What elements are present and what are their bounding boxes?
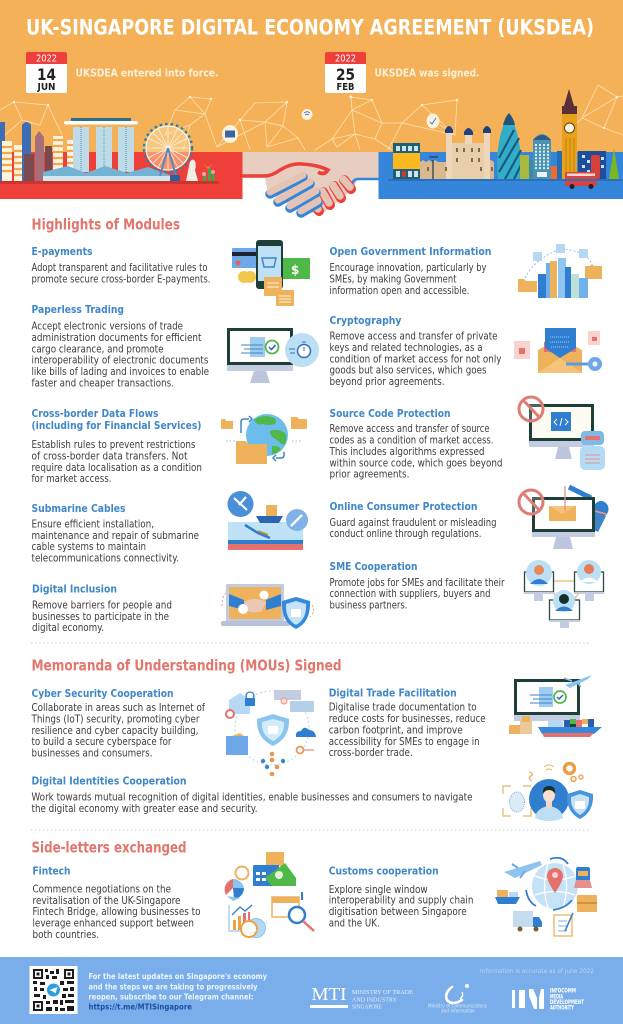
MOU: Cyber Security Cooperation: Collaborate in areas such as Internet of xyxy=(32,703,205,714)
icon: protected source code monitor xyxy=(519,397,605,470)
module: Source Code Protection: prior agreements. xyxy=(330,470,410,480)
footer call to action: https://t.me/MTISingapore xyxy=(88,1002,192,1012)
MOU: Digital Trade Facilitation: carbon footprint, and improve xyxy=(329,726,463,736)
side-letter: Fintech: Fintech xyxy=(32,864,70,878)
icon: mobile payment xyxy=(232,240,310,306)
module: Online Consumer Protection: Online Consumer Protection xyxy=(330,500,478,513)
divider xyxy=(31,642,590,644)
module: Cross-border Data Flows: require data localisation as a condition xyxy=(32,463,202,474)
module: Cross-border Data Flows: Establish rules to prevent restrictions xyxy=(32,440,196,451)
module: Open Government Information xyxy=(330,245,492,297)
date badge: 14 Jun 2022: 14 xyxy=(37,65,56,84)
module: Online Consumer Protection: conduct online through regulations. xyxy=(330,529,482,540)
module: Online Consumer Protection xyxy=(330,500,496,540)
date caption: signed: UKSDEA was signed. xyxy=(374,68,480,80)
icon: fishing email monitor xyxy=(519,486,608,549)
date badge: 25 Feb 2022 xyxy=(325,52,366,93)
module: Submarine Cables: Submarine Cables xyxy=(32,502,126,515)
icon: submarine cable repair xyxy=(228,491,308,550)
module: Cross-border Data Flows: of cross-border data transfers. Not xyxy=(32,452,188,462)
MOU: Digital Trade Facilitation: Digitalise trade documentation to xyxy=(329,702,477,714)
module: Paperless Trading: like bills of lading and invoices to enable xyxy=(32,367,209,378)
module: Cryptography xyxy=(330,314,502,388)
blue UK band xyxy=(378,152,623,199)
module: Digital Inclusion: Remove barriers for people and xyxy=(32,600,172,612)
logo: Ministry of Communications and Information: and Information xyxy=(441,1008,475,1014)
module: Source Code Protection: within source code, which goes beyond xyxy=(330,458,502,470)
side-letter: Fintech: both countries. xyxy=(32,930,99,941)
side-letter: Fintech: Fintech Bridge, allowing businesses to xyxy=(32,907,200,918)
icon: wifi bubble xyxy=(302,109,312,120)
icon: laptop handshake and shield xyxy=(221,584,314,629)
module: Cryptography: goods but also services, which goes xyxy=(330,366,486,376)
module: Submarine Cables: telecommunications connectivity. xyxy=(32,554,179,564)
MOU: Cyber Security Cooperation: resilience and cyber capacity building, xyxy=(32,726,198,737)
icon: fast document check xyxy=(227,328,319,383)
module: Submarine Cables: cable systems to maintain xyxy=(32,542,146,553)
logo: IMDA: DEVELOPMENT xyxy=(550,999,585,1006)
footer band xyxy=(0,957,623,1024)
side-letter: Fintech: leverage enhanced support between xyxy=(32,918,194,930)
footer call to action xyxy=(88,971,267,1012)
MOU: Digital Identities Cooperation xyxy=(32,774,472,815)
MOU: Cyber Security Cooperation: Cyber Security Cooperation xyxy=(32,687,174,700)
London skyline xyxy=(388,89,623,189)
module: Cross-border Data Flows: for market access. xyxy=(32,474,112,485)
MOU: Digital Trade Facilitation: accessibility for SMEs to engage in xyxy=(329,737,480,748)
footer call to action: For the latest updates on Singapore's economy xyxy=(88,971,267,981)
heading: MOUs signed: Memoranda of Understanding (MOUs) Signed xyxy=(32,656,342,674)
module: Digital Inclusion: businesses to participate in the xyxy=(32,612,169,623)
module: Cryptography: beyond prior agreements. xyxy=(330,377,444,388)
side-letter: Fintech xyxy=(32,864,200,941)
module: Source Code Protection: codes as a condition of market access. xyxy=(330,436,494,446)
module: Paperless Trading xyxy=(32,303,209,389)
module: Open Government Information: SMEs, by making Government xyxy=(330,274,456,286)
icon: mobile payment: $ xyxy=(291,263,299,277)
module: Paperless Trading: interoperability of electronic documents xyxy=(32,356,208,366)
side-letter: Customs cooperation: Customs cooperation xyxy=(329,864,439,878)
MOU: Digital Identities Cooperation: the digital economy with greater ease and security. xyxy=(32,804,258,815)
footer call to action: and the steps we are taking to progressively xyxy=(88,982,258,992)
icon: check bubble xyxy=(426,114,440,128)
icon: connected people on monitors xyxy=(524,560,604,628)
divider xyxy=(31,829,590,831)
module: Cryptography: keys and related technologies, as a xyxy=(330,343,482,354)
heading: Side-letters exchanged: Side-letters exchanged xyxy=(32,838,186,856)
icon: cyber security ring xyxy=(226,690,316,776)
side-letter: Customs cooperation: Explore single window xyxy=(329,885,428,896)
side-letter: Customs cooperation: interoperability and supply chain xyxy=(329,896,473,906)
module: Online Consumer Protection: Guard against fraudulent or misleading xyxy=(330,518,496,529)
MOU: Cyber Security Cooperation: Things (IoT) security, promoting cyber xyxy=(31,714,200,726)
date badge: 25 Feb 2022: 25 xyxy=(336,65,355,84)
date caption: entered into force: UKSDEA entered into force. xyxy=(76,68,218,80)
QR code xyxy=(30,966,78,1014)
footer call to action: reopen, subscribe to our Telegram channel: xyxy=(88,992,254,1002)
module: Digital Inclusion xyxy=(32,583,172,634)
icon: encrypted mail and key xyxy=(514,328,602,373)
side-letter: Customs cooperation: digitisation between Singapore xyxy=(329,907,467,918)
logo: Ministry of Communications and Information xyxy=(428,984,487,1014)
module: Source Code Protection xyxy=(329,407,502,480)
red Singapore band xyxy=(0,152,242,199)
module: Paperless Trading: administration documents for efficient xyxy=(32,333,202,344)
MOU: Digital Trade Facilitation xyxy=(329,686,486,759)
module: SME Cooperation: business partners. xyxy=(330,600,408,612)
module: Source Code Protection: This includes algorithms expressed xyxy=(329,447,484,458)
Singapore skyline xyxy=(0,118,219,184)
module: Submarine Cables xyxy=(32,502,199,564)
side-letter: Customs cooperation xyxy=(329,864,473,930)
module: SME Cooperation: connection with suppliers, buyers and xyxy=(330,589,490,600)
logo: IMDA xyxy=(512,987,585,1012)
date badge: 25 Feb 2022: FEB xyxy=(336,82,354,93)
MOU: Digital Trade Facilitation: Digital Trade Facilitation xyxy=(329,686,457,700)
side-letter: Customs cooperation: and the UK. xyxy=(329,918,380,930)
module: Paperless Trading: Accept electronic versions of trade xyxy=(32,322,183,332)
logo: MTI: AND INDUSTRY xyxy=(352,996,398,1003)
logo: MTI: SINGAPORE xyxy=(352,1004,382,1011)
module: Paperless Trading: cargo clearance, and promote xyxy=(32,344,164,355)
logo: MTI xyxy=(310,984,413,1011)
module: Cryptography: Cryptography xyxy=(330,314,402,327)
date badge: 25 Feb 2022: 2022 xyxy=(335,54,356,64)
icon: globe and folders xyxy=(221,414,307,464)
date badge: 14 Jun 2022 xyxy=(26,52,67,93)
logo: MTI: MINISTRY OF TRADE xyxy=(352,989,413,996)
module: Paperless Trading: Paperless Trading xyxy=(32,303,124,316)
module: Digital Inclusion: Digital Inclusion xyxy=(32,583,117,596)
module: Open Government Information: Encourage innovation, particularly by xyxy=(330,263,486,274)
MOU: Digital Identities Cooperation: Digital Identities Cooperation xyxy=(32,774,186,787)
module: Paperless Trading: faster and cheaper transactions. xyxy=(32,378,174,389)
accuracy note: Information is accurate as of June 2022 xyxy=(480,967,594,975)
module: E-payments: promote secure cross-border E-payments. xyxy=(32,274,210,286)
MOU: Digital Identities Cooperation: Work towards mutual recognition of digital identities, enable businesses and consumers to navigate xyxy=(32,792,472,804)
icon: fintech cluster xyxy=(225,852,314,938)
module: Cross-border Data Flows xyxy=(32,407,202,485)
icon: trade monitor with ship and plane xyxy=(509,675,602,737)
MOU: Digital Trade Facilitation: cross-border trade. xyxy=(329,748,413,759)
logo: MTI: MTI xyxy=(312,984,347,1004)
module: SME Cooperation xyxy=(330,560,505,612)
icon: envelope bubble xyxy=(222,125,238,143)
handshake xyxy=(242,152,378,214)
icon: global logistics xyxy=(495,858,597,936)
module: Submarine Cables: Ensure efficient installation, xyxy=(32,520,154,530)
module: Cross-border Data Flows: Cross-border Data Flows xyxy=(32,407,158,420)
module: Open Government Information: Open Government Information xyxy=(330,245,492,258)
module: Source Code Protection: Remove access and transfer of source xyxy=(330,424,490,435)
side-letter: Fintech: revitalisation of the UK-Singapore xyxy=(32,896,180,907)
module: Source Code Protection: Source Code Protection xyxy=(330,407,450,420)
icon: digital identity xyxy=(503,764,593,821)
logo: Ministry of Communications and Information: Ministry of Communications xyxy=(428,1004,487,1010)
header banner xyxy=(0,0,623,152)
logo: IMDA: MEDIA xyxy=(550,994,563,1000)
MOU: Cyber Security Cooperation xyxy=(31,687,205,760)
icon: city data cloud xyxy=(518,244,602,298)
module: Open Government Information: information open and accessible. xyxy=(330,286,470,297)
module: E-payments: Adopt transparent and facilitative rules to xyxy=(32,263,208,274)
module: Cryptography: condition of market access for not only xyxy=(330,354,502,365)
MOU: Cyber Security Cooperation: businesses and consumers. xyxy=(32,748,152,760)
heading: Highlights of Modules: Highlights of Modules xyxy=(32,216,180,234)
module: E-payments xyxy=(32,245,210,286)
module: Submarine Cables: maintenance and repair of submarine xyxy=(32,531,199,542)
module: E-payments: E-payments xyxy=(32,245,92,258)
module: SME Cooperation: Promote jobs for SMEs and facilitate their xyxy=(330,578,505,589)
date badge: 14 Jun 2022: 2022 xyxy=(36,54,57,64)
module: Cross-border Data Flows: (including for Financial Services) xyxy=(32,419,202,432)
logo: IMDA: INFOCOMM xyxy=(550,987,576,994)
module: Digital Inclusion: digital economy. xyxy=(32,623,104,634)
MOU: Cyber Security Cooperation: to build a secure cyberspace for xyxy=(32,737,172,748)
date badge: 14 Jun 2022: JUN xyxy=(37,82,56,93)
MOU: Digital Trade Facilitation: reduce costs for businesses, reduce xyxy=(329,714,486,725)
side-letter: Fintech: Commence negotiations on the xyxy=(32,884,171,896)
module: Cryptography: Remove access and transfer of private xyxy=(330,332,498,342)
module: SME Cooperation: SME Cooperation xyxy=(330,560,418,573)
logo: IMDA: AUTHORITY xyxy=(550,1005,574,1012)
